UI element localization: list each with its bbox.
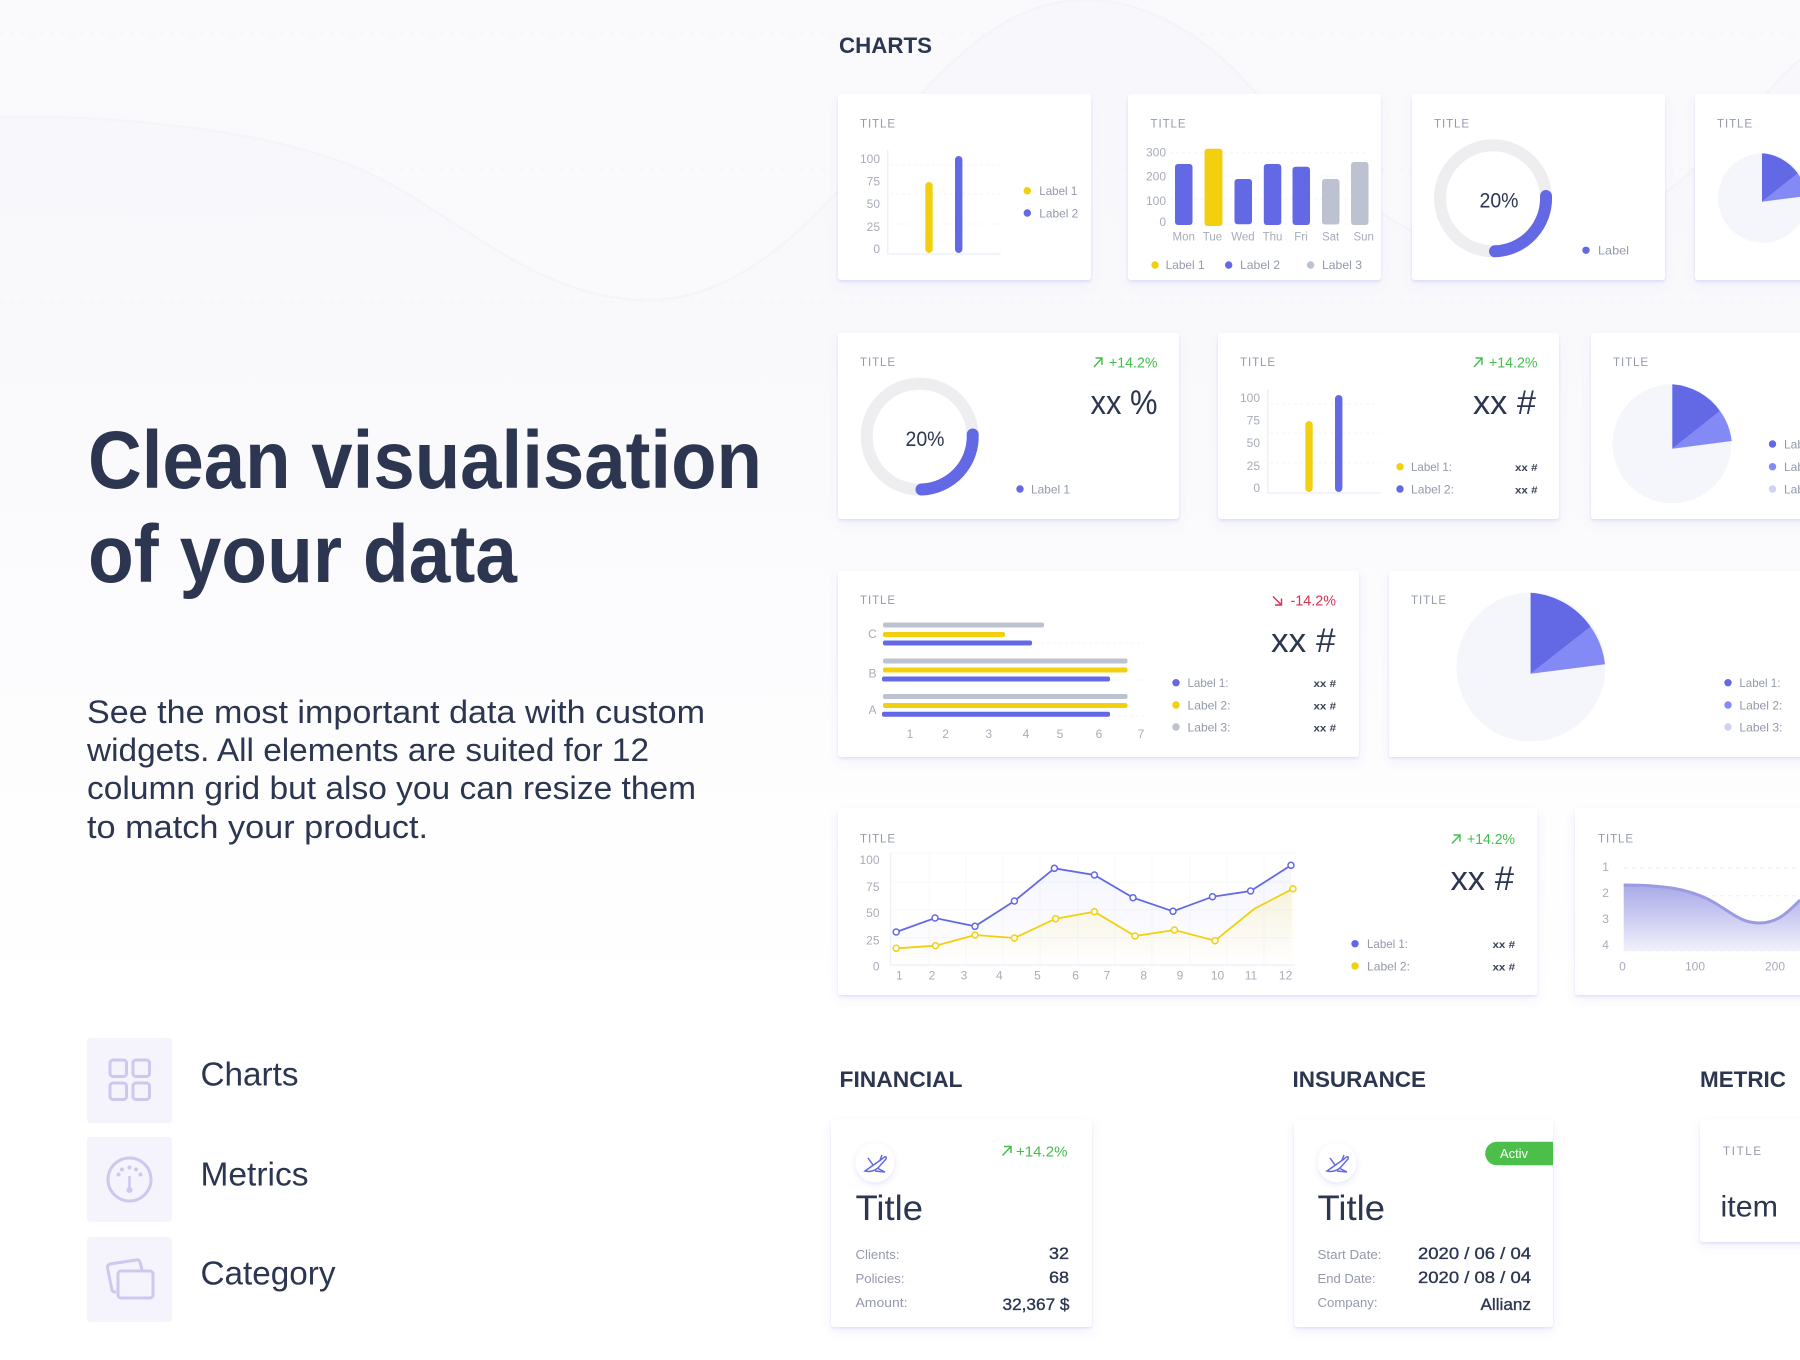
bar chart: 200	[1146, 170, 1166, 184]
description paragraph	[86, 694, 705, 845]
data rows: 68	[1049, 1268, 1069, 1287]
bar chart: 100	[860, 152, 880, 166]
bar chart: 300	[1146, 146, 1166, 160]
bar chart: 100	[1240, 391, 1260, 405]
line chart: 2	[929, 968, 936, 982]
line chart: 0	[873, 960, 880, 974]
bar chart: 0	[1159, 215, 1166, 229]
card title: TITLE	[1723, 1146, 1762, 1158]
label: category: Category	[200, 1254, 336, 1292]
area chart	[1602, 860, 1800, 974]
card title: TITLE	[860, 118, 896, 130]
panel: bars with metric	[1218, 333, 1559, 519]
horizontal bar chart: A	[868, 703, 877, 717]
legend: Label 2:	[1188, 698, 1230, 712]
bar chart: 75	[1247, 414, 1260, 428]
line chart: 12	[1279, 968, 1293, 982]
legend	[1396, 460, 1538, 496]
trend: up: +14.2%	[1016, 1144, 1068, 1161]
trend: down: -14.2%	[1290, 593, 1336, 610]
horizontal bar chart: 6	[1096, 727, 1103, 741]
panel: line chart	[838, 808, 1538, 995]
icon: grid	[87, 1038, 172, 1123]
legend: Label 3	[1322, 258, 1362, 272]
data rows: End Date:	[1318, 1271, 1376, 1286]
card title: TITLE	[1411, 595, 1447, 607]
line chart: 9	[1177, 968, 1184, 982]
card title: TITLE	[1240, 357, 1276, 369]
legend: xx #	[1492, 939, 1515, 951]
horizontal bar chart: B	[868, 667, 877, 681]
status badge: Activ	[1500, 1147, 1529, 1161]
description paragraph: to match your product.	[87, 809, 428, 845]
bar chart: 25	[867, 220, 880, 234]
bar chart: Wed	[1231, 232, 1255, 244]
area chart: 2	[1602, 886, 1609, 900]
line chart	[859, 853, 1296, 982]
headline: of your data	[88, 509, 518, 600]
heading: insurance: INSURANCE	[1292, 1067, 1426, 1092]
data rows: Company:	[1318, 1295, 1378, 1310]
card heading: Title	[1318, 1189, 1385, 1228]
data rows: Allianz	[1480, 1295, 1531, 1314]
area chart: 100	[1685, 960, 1705, 974]
line chart: 11	[1245, 968, 1258, 982]
data rows	[856, 1244, 1070, 1314]
panel: area chart	[1575, 808, 1800, 995]
metric value: xx #	[1473, 384, 1536, 422]
trend: up: +14.2%	[1467, 831, 1515, 848]
legend: Label 3:	[1739, 720, 1782, 734]
description paragraph: column grid but also you can resize them	[87, 770, 696, 806]
panel: horizontal bars	[838, 571, 1359, 757]
card title: TITLE	[1434, 118, 1470, 130]
headline: Clean visualisation	[88, 415, 762, 506]
data rows: Policies:	[856, 1271, 904, 1286]
metric value: xx #	[1450, 860, 1514, 898]
line chart: 3	[961, 968, 968, 982]
card title: TITLE	[1613, 357, 1649, 369]
card title: TITLE	[860, 357, 896, 369]
bar chart	[1240, 389, 1381, 495]
area chart: 200	[1765, 960, 1785, 974]
trend: down	[1273, 593, 1336, 610]
donut chart: 20%	[1480, 190, 1518, 213]
legend: Label 1:	[1188, 676, 1228, 690]
data rows: 2020 / 08 / 04	[1418, 1268, 1531, 1287]
metric value: xx %	[1090, 384, 1158, 422]
panel: two-bar chart	[838, 94, 1091, 280]
status badge	[1485, 1142, 1553, 1165]
icon: plane	[856, 1143, 894, 1182]
card title: TITLE	[1150, 118, 1186, 130]
data rows	[1318, 1244, 1531, 1314]
panel: donut small	[1412, 94, 1665, 280]
line chart: 100	[859, 853, 880, 867]
legend	[1351, 937, 1515, 974]
card title: TITLE	[1717, 118, 1753, 130]
legend: Label 1	[1031, 482, 1070, 496]
legend: Label 3:	[1188, 720, 1230, 734]
data rows: 32,367 $	[1002, 1295, 1070, 1314]
line chart: 5	[1034, 968, 1041, 982]
panel: insurance card	[1294, 1120, 1553, 1327]
bar chart: 25	[1247, 459, 1260, 473]
bar chart: Fri	[1294, 232, 1308, 244]
legend: Label 2:	[1411, 482, 1454, 496]
label: metrics: Metrics	[200, 1156, 308, 1192]
horizontal bar chart: 2	[942, 727, 949, 741]
line chart: 50	[866, 906, 880, 920]
line chart: 75	[866, 880, 880, 894]
metric value: xx #	[1271, 622, 1336, 660]
bar chart	[1146, 146, 1374, 244]
line chart: 10	[1211, 968, 1224, 982]
legend	[1151, 258, 1362, 272]
panel: donut with metric	[838, 333, 1179, 519]
panel: metric card	[1700, 1119, 1800, 1242]
donut chart	[1440, 145, 1546, 251]
trend: up: +14.2%	[1109, 354, 1158, 372]
donut chart	[867, 384, 973, 490]
legend: Label 2	[1240, 258, 1280, 272]
legend	[1024, 184, 1079, 220]
line chart: 1	[896, 968, 903, 982]
icon: plane	[1318, 1143, 1356, 1182]
bar chart: 50	[867, 197, 880, 211]
legend: Label 1:	[1739, 676, 1780, 690]
legend: xx #	[1314, 678, 1336, 690]
bar chart: 0	[873, 242, 880, 256]
data rows: Start Date:	[1318, 1247, 1382, 1262]
pie chart	[1456, 592, 1606, 742]
bar chart: 100	[1146, 194, 1166, 208]
bar chart: 0	[1253, 481, 1260, 495]
card title: TITLE	[860, 834, 896, 846]
card heading: Title	[856, 1189, 923, 1228]
line chart: 8	[1140, 968, 1147, 982]
headline	[88, 415, 762, 600]
data rows: Clients:	[856, 1247, 900, 1262]
icon: cards	[87, 1237, 172, 1322]
legend	[1172, 676, 1336, 734]
data rows: Amount:	[856, 1295, 908, 1310]
description paragraph: See the most important data with custom	[87, 694, 705, 730]
data rows: 32	[1049, 1244, 1069, 1263]
horizontal bar chart	[868, 622, 1145, 741]
area chart: 4	[1602, 938, 1609, 952]
legend: Label 1	[1166, 258, 1205, 272]
legend: Label 1	[1039, 184, 1078, 198]
bar chart	[860, 150, 1001, 256]
horizontal bar chart: 1	[907, 727, 914, 741]
legend: Label 2:	[1739, 698, 1782, 712]
heading: financial: FINANCIAL	[840, 1067, 962, 1092]
bar chart: Tue	[1203, 232, 1222, 244]
data rows: 2020 / 06 / 04	[1418, 1244, 1531, 1263]
legend	[1724, 676, 1782, 734]
legend: xx #	[1515, 462, 1538, 474]
pie chart	[1612, 384, 1732, 503]
bar chart: Sat	[1322, 232, 1340, 244]
description paragraph: widgets. All elements are suited for 12	[86, 732, 649, 768]
bar chart: Mon	[1173, 232, 1195, 244]
panel: pie small	[1695, 94, 1800, 280]
card title: TITLE	[1598, 834, 1634, 846]
legend: Label 1:	[1367, 937, 1408, 951]
line chart: 4	[996, 968, 1003, 982]
panel: financial card	[831, 1119, 1092, 1327]
area chart: 0	[1619, 960, 1626, 974]
legend: Label 2:	[1367, 960, 1410, 974]
icon: gauge	[87, 1137, 172, 1222]
feature: category	[87, 1237, 336, 1322]
panel: weekly bar chart	[1128, 94, 1381, 280]
horizontal bar chart: 5	[1057, 727, 1064, 741]
area chart: 3	[1602, 912, 1609, 926]
bar chart: Sun	[1353, 232, 1374, 244]
pie chart	[1718, 153, 1800, 243]
panel: pie medium	[1591, 333, 1800, 519]
horizontal bar chart: 7	[1138, 727, 1145, 741]
legend: xx #	[1314, 700, 1336, 712]
bar chart: Thu	[1263, 232, 1282, 244]
bar chart: 75	[867, 174, 880, 188]
legend: xx #	[1314, 722, 1336, 734]
legend: xx #	[1515, 484, 1538, 496]
metric item: item	[1720, 1190, 1778, 1224]
legend: Label 1:	[1411, 460, 1452, 474]
legend	[1769, 438, 1800, 496]
feature: metrics	[87, 1137, 308, 1222]
donut chart: 20%	[906, 428, 944, 451]
card title: TITLE	[860, 595, 896, 607]
heading: metric: METRIC	[1700, 1067, 1786, 1092]
area chart: 1	[1602, 860, 1609, 874]
trend: up: +14.2%	[1489, 354, 1538, 372]
legend: Label 2	[1039, 206, 1079, 220]
line chart: 6	[1072, 968, 1079, 982]
label: charts: Charts	[200, 1056, 298, 1092]
line chart: 7	[1104, 968, 1111, 982]
panel: pie large	[1389, 571, 1800, 757]
horizontal bar chart: C	[868, 627, 877, 641]
feature: charts	[87, 1038, 298, 1123]
legend: xx #	[1492, 962, 1515, 974]
heading: charts: CHARTS	[839, 33, 932, 58]
line chart: 25	[866, 934, 880, 948]
legend: Label	[1598, 244, 1629, 258]
legend	[1582, 244, 1629, 258]
bar chart: 50	[1247, 436, 1260, 450]
horizontal bar chart: 4	[1023, 727, 1030, 741]
horizontal bar chart: 3	[985, 727, 992, 741]
